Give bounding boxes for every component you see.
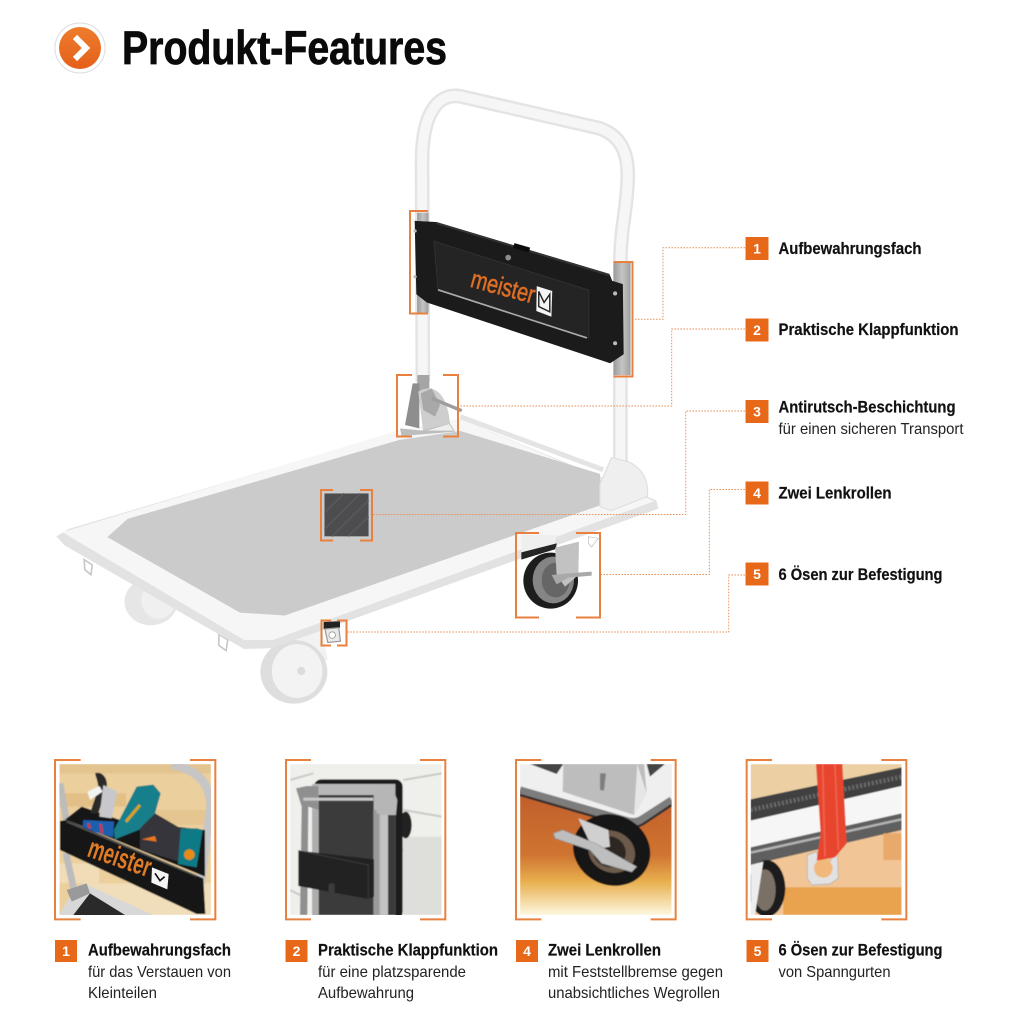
- callout 3: Antirutsch-Beschichtung: [778, 398, 956, 416]
- panel 4 bracket: [747, 760, 906, 919]
- photo panel 1: storage compartment with tools: meister: [84, 832, 156, 884]
- callout 3: 3: [753, 404, 761, 420]
- panel 2 bracket: [286, 760, 445, 919]
- photo panel 4: lashing eye with strap: [747, 760, 906, 919]
- rear left wheel, faded: [124, 578, 178, 625]
- lashing eye detail: [324, 621, 340, 642]
- photo panel 2: folded cart: [286, 760, 445, 919]
- caption 4: 6 Ösen zur Befestigung: [778, 940, 942, 960]
- callout 4: 4: [753, 485, 761, 501]
- caption 3: Zwei Lenkrollen: [548, 942, 661, 960]
- folding rail: [460, 417, 603, 470]
- photo panel 1: storage compartment with tools: [55, 760, 215, 919]
- lashing eyes, faded: [84, 560, 228, 651]
- meister logo: meister: [468, 265, 538, 309]
- callout 3: für einen sicheren Transport: [778, 421, 964, 438]
- caption 3: 4: [523, 943, 531, 959]
- steering caster: [521, 535, 598, 609]
- caption 4: von Spanngurten: [778, 964, 890, 981]
- panel 3 bracket: [516, 760, 676, 919]
- right hinge, faded: [600, 458, 648, 511]
- caption 2: Praktische Klappfunktion: [318, 942, 498, 960]
- caption 3: [516, 940, 723, 1002]
- caption 3: unabsichtliches Wegrollen: [548, 985, 720, 1002]
- caption 1: Kleinteilen: [88, 985, 157, 1002]
- panel 1 bracket: [55, 760, 215, 919]
- caption 2: Aufbewahrung: [318, 985, 414, 1002]
- caption 1: 1: [62, 943, 70, 959]
- highlighted handle tubes: [417, 213, 631, 375]
- caption 1: Aufbewahrungsfach: [88, 942, 231, 960]
- callout 1: Aufbewahrungsfach: [778, 240, 922, 258]
- caption 2: 2: [293, 943, 301, 959]
- callout 5: 6 Ösen zur Befestigung: [778, 565, 942, 584]
- leader lines: [347, 248, 745, 632]
- title icon: orange chevron badge: [55, 23, 105, 73]
- platform frame: [56, 419, 658, 649]
- title: Produkt-Features: [122, 21, 447, 74]
- main product image: platform cart: [56, 96, 658, 704]
- callout 2: Praktische Klappfunktion: [778, 321, 958, 339]
- callout 4: Zwei Lenkrollen: [778, 484, 892, 502]
- caption 1: für das Verstauen von: [88, 964, 231, 981]
- handle: [422, 96, 628, 472]
- storage compartment: [413, 221, 624, 363]
- caption 4: [746, 940, 942, 981]
- callout 4: [746, 482, 892, 504]
- caption 4: 5: [754, 943, 762, 959]
- caption 3: mit Feststellbremse gegen: [548, 964, 723, 981]
- callout 2: 2: [753, 322, 761, 338]
- photo panel 3: caster with brake: [516, 760, 676, 919]
- caption 1: [55, 940, 231, 1002]
- callout 3: [746, 398, 964, 438]
- anti-slip mat, faded: [107, 431, 602, 616]
- callout 1: [746, 237, 922, 260]
- folding hinge: [400, 375, 462, 436]
- anti-slip mat sample: [324, 493, 369, 536]
- callout 2: [746, 318, 958, 342]
- highlight brackets on the cart: [321, 211, 632, 646]
- front wheel, faded: [260, 627, 328, 704]
- callout 1: 1: [753, 240, 761, 256]
- caption 2: [286, 940, 498, 1002]
- caption 2: für eine platzsparende: [318, 964, 466, 981]
- callout 5: 5: [753, 566, 761, 582]
- callout 5: [746, 562, 942, 586]
